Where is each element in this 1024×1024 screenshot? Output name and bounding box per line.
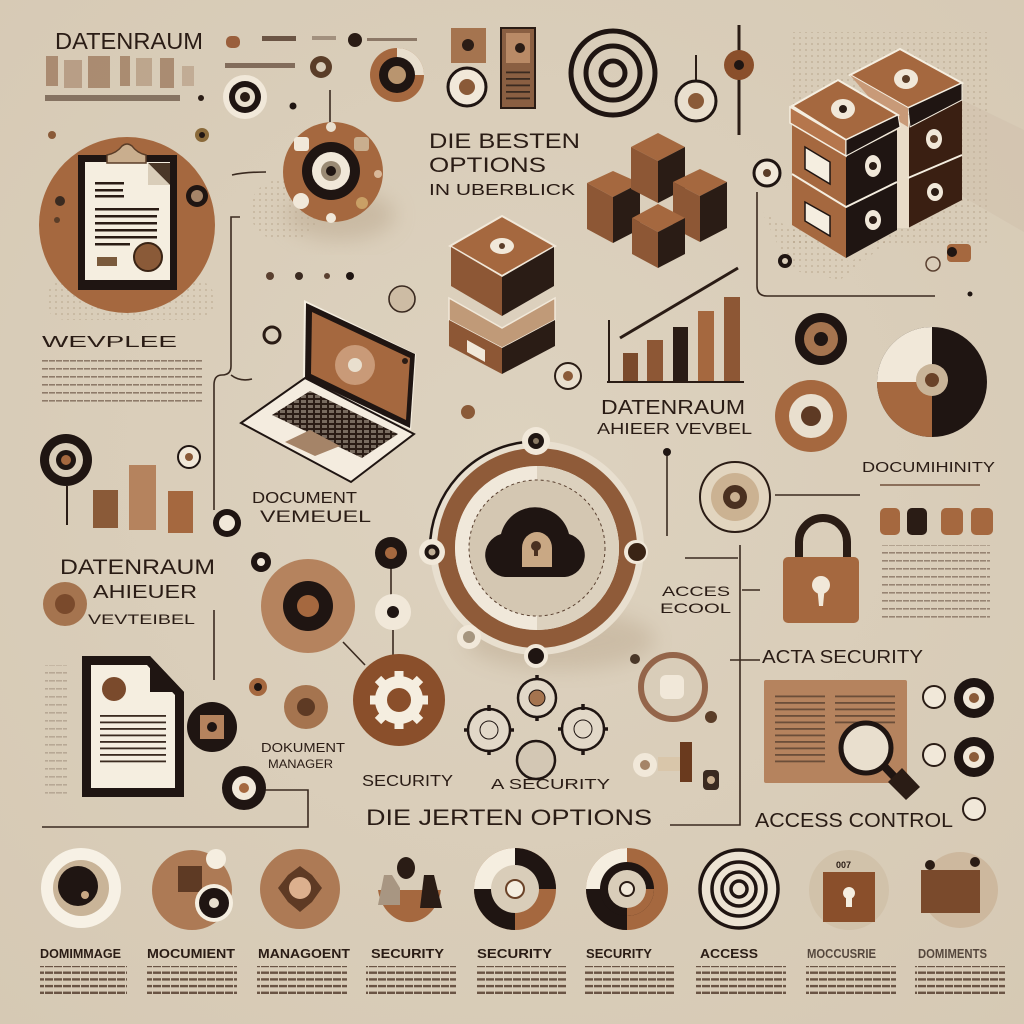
icons: top row small [48, 28, 535, 142]
labels: bottom row: SECURITY [586, 946, 652, 961]
connector lines [42, 90, 935, 827]
heading: access control: ACCESS CONTROL [755, 809, 953, 832]
labels: bottom row: MOCCUSRIE [807, 946, 876, 961]
icon: small disc left [43, 582, 87, 626]
text block: access control small: ECOOL [660, 600, 731, 616]
text block: datenraum left [60, 556, 215, 627]
labels: bottom row: DOMIMMAGE [40, 946, 121, 961]
icons: right column nodes [923, 678, 994, 820]
icon: clipboard circle [39, 137, 215, 313]
labels: bottom row: SECURITY [371, 946, 444, 961]
heading: die jerten options: DIE JERTEN OPTIONS [366, 805, 652, 830]
text block: documentity [862, 459, 995, 486]
text block: document center left: DOCUMENT [252, 490, 357, 507]
text block: datenraum center [597, 397, 752, 438]
text block: datenraum center: AHIEER VEVBEL [597, 421, 752, 438]
heading: die besten optionen: IN UBERBLICK [429, 182, 575, 199]
chart: donut right [795, 313, 987, 437]
icons: cluster bottom centre [630, 448, 719, 790]
icon: gear hub [283, 122, 383, 223]
text block: document management: DOKUMENT [261, 740, 345, 755]
icons: left of ring [261, 537, 411, 653]
icon: pins top [676, 25, 754, 135]
labels: bottom row [40, 946, 987, 961]
heading: die besten optionen [429, 130, 580, 199]
icon: disc right [775, 380, 847, 452]
small items under box stack [754, 160, 972, 296]
labels: bottom row: SECURITY [477, 946, 552, 961]
icons: small tiles right [880, 508, 993, 535]
icon: target and bars left [40, 434, 200, 533]
dotted ground textures [45, 32, 1024, 670]
text block: document management: MANAGER [268, 757, 333, 771]
icon row: bottom [41, 848, 998, 930]
text block: document management [261, 740, 345, 771]
heading: acta security: ACTA SECURITY [762, 647, 923, 667]
icon: wood disc [700, 462, 770, 532]
icon: small boxes cluster [587, 133, 727, 268]
small glyphs center-left [264, 272, 581, 419]
icon: large box stack [790, 49, 962, 258]
text block: documentity: DOCUMIHINITY [862, 459, 995, 476]
chart: central ring [419, 427, 648, 668]
heading: die besten optionen: OPTIONS [429, 154, 546, 177]
heading: Datenraum top left [45, 28, 204, 101]
text block: wevplee left: WEVPLEE [42, 334, 177, 351]
label: a security: A SECURITY [491, 776, 610, 793]
text block: datenraum center: DATENRAUM [601, 397, 745, 419]
heading: Datenraum top left: DATENRAUM [55, 28, 203, 54]
labels: bottom row: MANAGOENT [258, 946, 350, 961]
text lines: bottom row [40, 966, 1005, 998]
text block: document center left [252, 490, 371, 526]
labels: bottom row: ACCESS [700, 946, 758, 961]
icons: gear trio [464, 675, 608, 779]
icon: padlock [783, 518, 859, 623]
icons: lower left small [45, 665, 328, 810]
text block: wevplee left [42, 334, 202, 405]
text block: datenraum left: VEVTEIBEL [88, 611, 195, 627]
text lines: right [882, 545, 990, 620]
icon: target top [571, 31, 655, 115]
text block: access control small: ACCES [662, 583, 730, 599]
icon row: bottom: 007 [836, 860, 851, 870]
text block: document center left: VEMEUEL [260, 507, 371, 526]
heading: die besten optionen: DIE BESTEN [429, 130, 580, 153]
label: security: SECURITY [362, 773, 453, 790]
labels: bottom row: DOMIMENTS [918, 946, 987, 961]
icon: gear [353, 654, 445, 746]
text block: datenraum left: AHIEUER [93, 582, 197, 602]
panel: data card with magnifier [764, 680, 920, 800]
icon: document left bottom [82, 656, 184, 797]
icon: middle box stack [449, 216, 555, 374]
bar chart: top middle [607, 268, 744, 382]
text block: datenraum left: DATENRAUM [60, 556, 215, 579]
icon: laptop [241, 300, 416, 482]
icon: node ring [213, 509, 271, 572]
text block: access control small [660, 583, 731, 616]
labels: bottom row: MOCUMIENT [147, 946, 235, 961]
